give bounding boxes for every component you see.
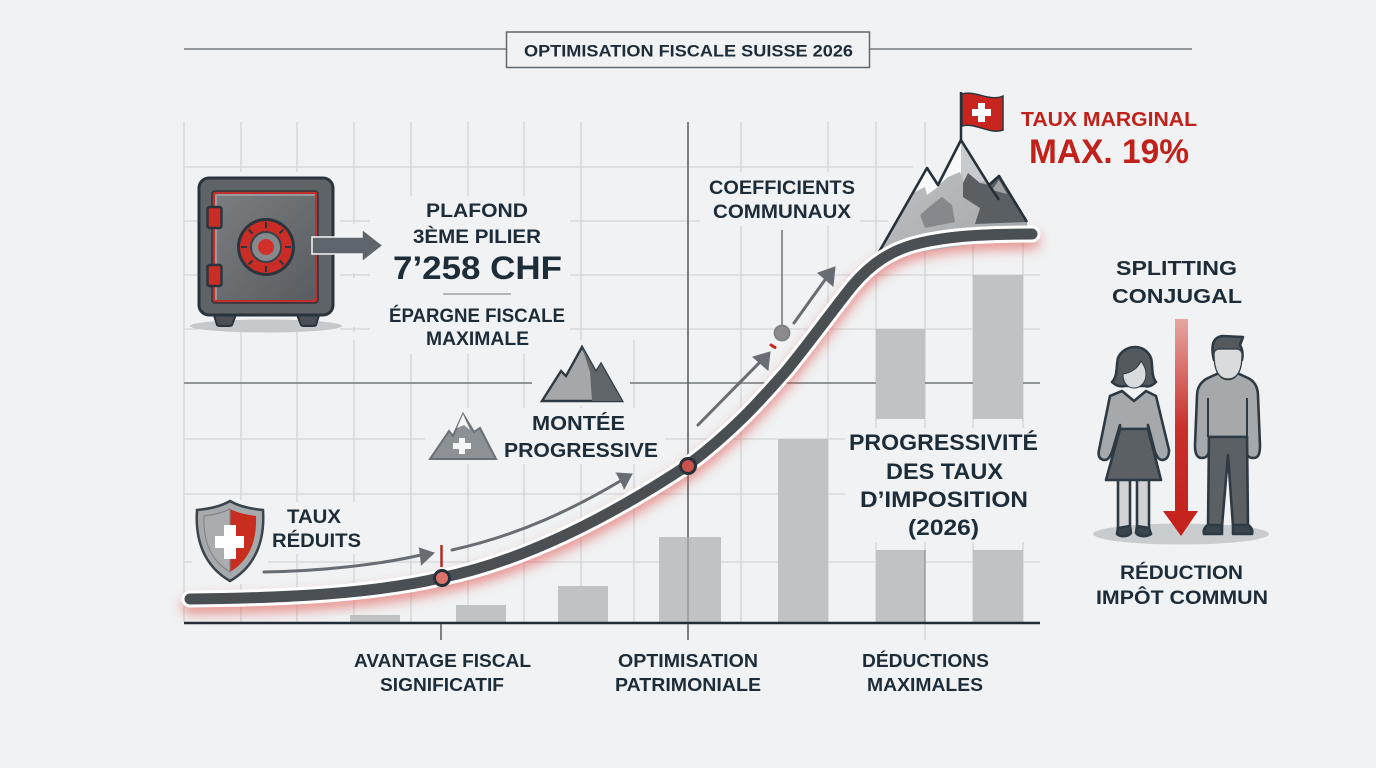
text: deductions maximales: MAXIMALES — [867, 675, 983, 695]
text: avantage fiscal: SIGNIFICATIF — [380, 675, 504, 695]
text: plafond 3e pilier: ÉPARGNE FISCALE — [389, 305, 565, 327]
text: taux reduits: TAUX — [287, 507, 341, 528]
text: plafond 3e pilier: 3ÈME PILIER — [413, 225, 541, 248]
text: avantage fiscal: AVANTAGE FISCAL — [354, 651, 531, 671]
text: taux reduits: RÉDUITS — [272, 530, 361, 552]
red tick marks — [442, 345, 775, 567]
grid gaps behind labels — [192, 172, 1043, 584]
text: coefficients communaux — [709, 177, 855, 223]
text: plafond 3e pilier — [389, 200, 565, 350]
icon: safe — [190, 178, 342, 332]
text: optimisation patrimoniale — [615, 651, 761, 695]
text: plafond 3e pilier: PLAFOND — [426, 200, 528, 222]
text: montee progressive — [504, 412, 658, 462]
text: progressivite: D’IMPOSITION — [860, 487, 1028, 512]
text: avantage fiscal — [354, 651, 531, 695]
bar chart — [350, 275, 1023, 622]
icon: summit mountain with flag — [879, 92, 1027, 258]
icon: woman — [1099, 347, 1169, 536]
text: splitting conjugal: SPLITTING — [1116, 257, 1237, 280]
text: taux marginal — [1021, 108, 1197, 171]
text: coefficients communaux: COMMUNAUX — [713, 201, 851, 223]
text: progressivite: DES TAUX — [886, 459, 1003, 484]
text: splitting conjugal — [1112, 257, 1242, 308]
text: montee progressive: PROGRESSIVE — [504, 439, 658, 462]
text: plafond 3e pilier: MAXIMALE — [426, 329, 529, 350]
curve nodes — [434, 458, 696, 586]
text: optimisation patrimoniale: PATRIMONIALE — [615, 675, 761, 695]
title: OPTIMISATION FISCALE SUISSE 2026 — [524, 42, 853, 60]
text: taux marginal: MAX. 19% — [1029, 133, 1189, 171]
growth arrows — [264, 267, 835, 572]
axis line — [184, 622, 1040, 624]
text: splitting conjugal: CONJUGAL — [1112, 285, 1242, 308]
leader with marker — [774, 230, 790, 340]
header — [184, 32, 1192, 68]
text: reduction impot commun — [1096, 561, 1268, 609]
text: taux marginal: TAUX MARGINAL — [1021, 108, 1197, 131]
ground shadow — [1093, 524, 1269, 544]
text: progressivite — [849, 430, 1038, 540]
arrow: safe to ceiling — [312, 229, 383, 262]
text: deductions maximales — [862, 650, 989, 695]
text: progressivite: (2026) — [908, 515, 979, 540]
text: reduction impot commun: RÉDUCTION — [1120, 561, 1243, 584]
icon: mountain — [542, 347, 622, 401]
icon: shield — [197, 501, 263, 581]
text: reduction impot commun: IMPÔT COMMUN — [1096, 585, 1268, 609]
curve glow — [190, 241, 1032, 606]
text: taux reduits — [272, 507, 361, 552]
text: progressivite: PROGRESSIVITÉ — [849, 430, 1038, 455]
text: deductions maximales: DÉDUCTIONS — [862, 650, 989, 671]
rate curve — [190, 234, 1032, 599]
text: optimisation patrimoniale: OPTIMISATION — [618, 651, 758, 671]
icon: mountain with cross — [430, 414, 496, 459]
text: coefficients communaux: COEFFICIENTS — [709, 177, 855, 199]
text: montee progressive: MONTÉE — [532, 412, 625, 435]
text: plafond 3e pilier: 7’258 CHF — [393, 250, 562, 286]
icon: man — [1195, 336, 1260, 534]
arrow: tax reduction — [1163, 319, 1198, 536]
